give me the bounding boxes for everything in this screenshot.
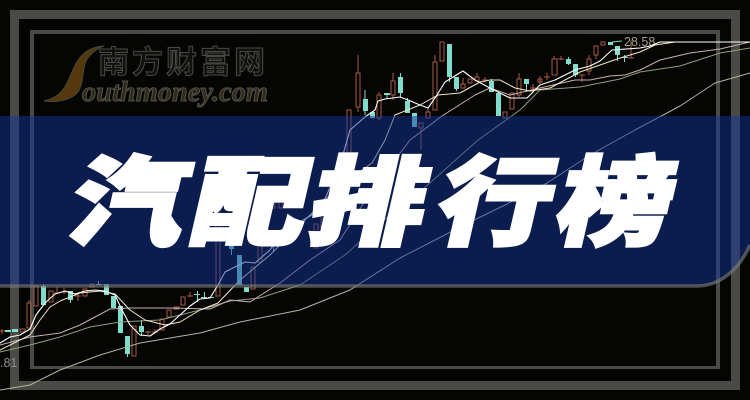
navy title band	[0, 116, 750, 286]
candlestick chart	[0, 35, 655, 370]
character: 配: 配	[181, 125, 327, 265]
band outline	[0, 245, 750, 286]
price label: 28.58	[624, 35, 655, 49]
character: 汽: 汽	[59, 125, 205, 265]
MA30 line	[0, 48, 750, 352]
character: 行: 行	[426, 125, 572, 265]
icon: brown S swoosh	[44, 46, 104, 102]
red candles	[0, 40, 634, 356]
inner frame	[30, 30, 720, 369]
title	[59, 125, 692, 265]
cyan candles	[5, 42, 628, 357]
watermark Latin text: outhmoney.com	[82, 76, 268, 108]
character: 榜: 榜	[546, 125, 692, 265]
MA60 line	[0, 73, 750, 390]
character: 排: 排	[299, 125, 445, 265]
watermark: Southmoney logo	[44, 45, 268, 108]
low price label: .81	[0, 356, 17, 370]
watermark Chinese text: 南方财富网	[98, 45, 268, 80]
MA20 line	[0, 42, 750, 345]
MA10 line	[0, 42, 750, 350]
MA5 line	[0, 42, 750, 343]
